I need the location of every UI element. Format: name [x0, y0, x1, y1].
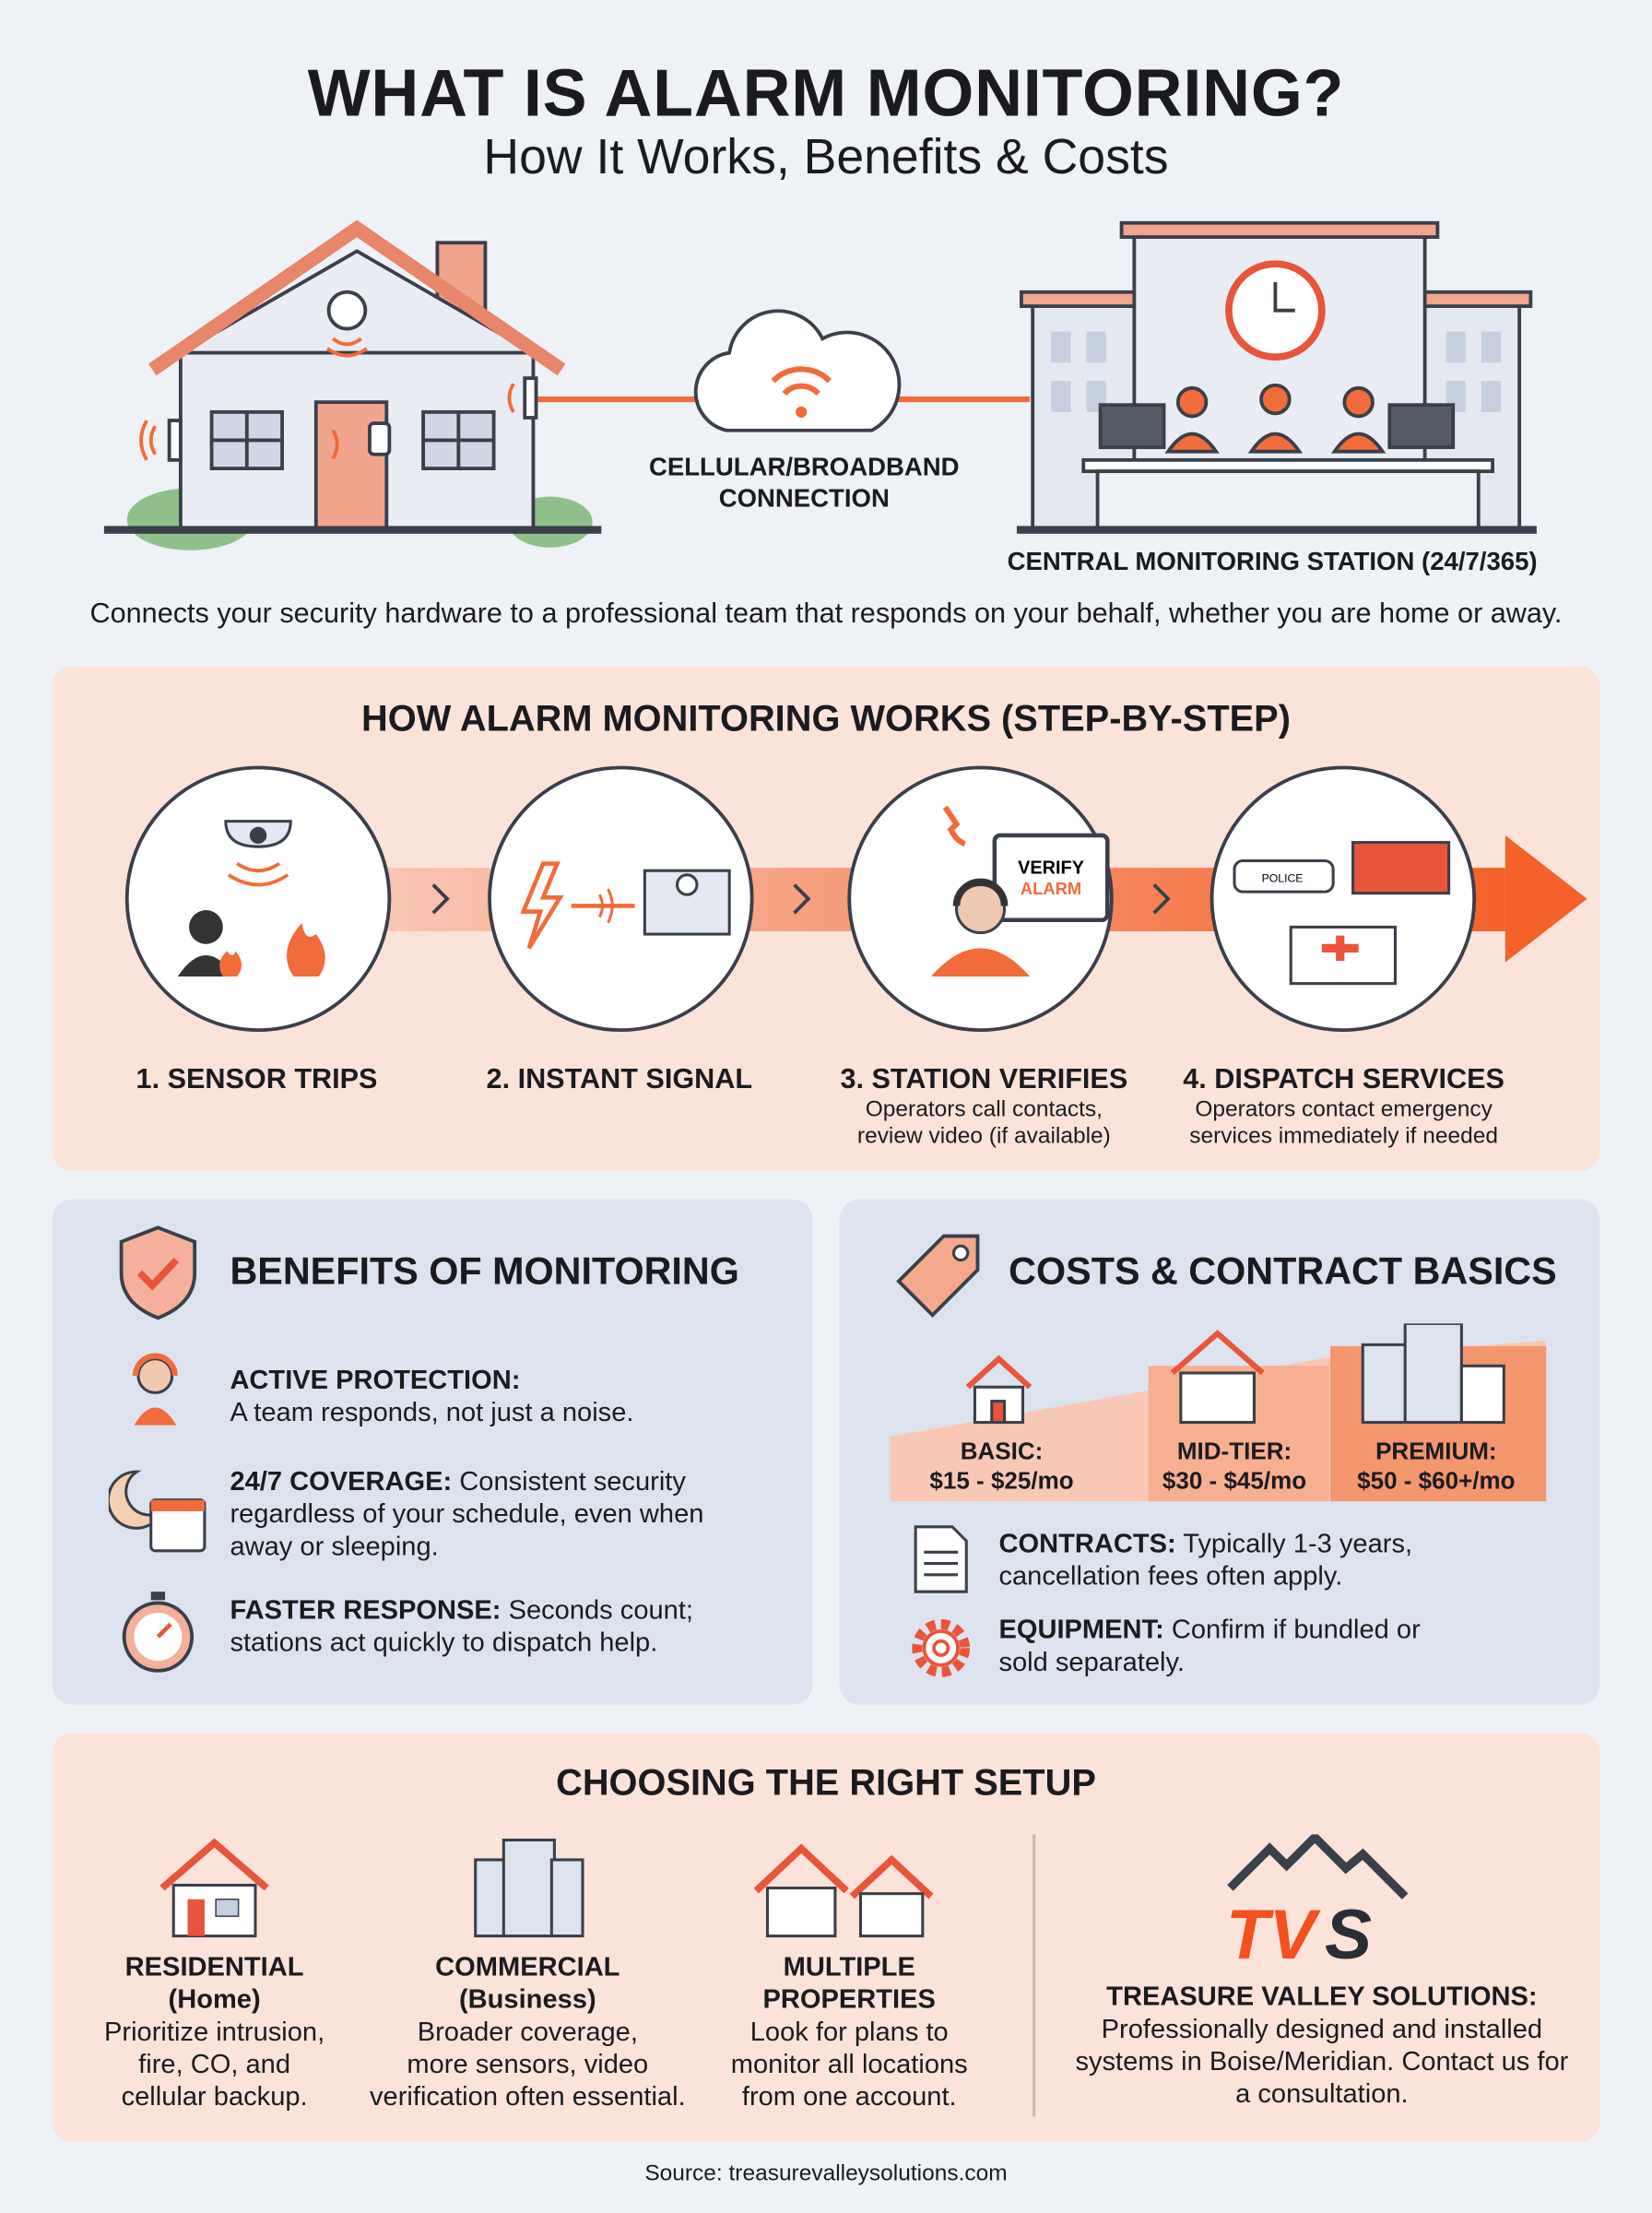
equipment: EQUIPMENT: Confirm if bundled or — [998, 1615, 1421, 1645]
label: connection: CONNECTION — [719, 484, 890, 512]
option: commercial: (Business) — [459, 1985, 596, 2015]
tier labels — [929, 1438, 1074, 1495]
option: multiple: MULTIPLE — [784, 1953, 915, 1982]
icon: shield — [120, 1225, 197, 1320]
panel: choosing setup — [53, 1733, 1599, 2142]
tier labels: $15 - $25/mo — [929, 1468, 1074, 1495]
benefit 2: 24/7 COVERAGE: Consistent security regardless of your schedule, even when away or sleeping. — [230, 1468, 703, 1562]
hero illustration — [103, 219, 1537, 550]
title: WHAT IS ALARM MONITORING? — [308, 55, 1344, 130]
option: multiple: PROPERTIES — [763, 1985, 936, 2015]
step 3 icon: VERIFY — [1018, 858, 1084, 878]
option: residential — [104, 1839, 324, 2112]
panel: how it works: Operators call contacts, — [866, 1098, 1103, 1122]
heading: costs: COSTS & CONTRACT BASICS — [1009, 1250, 1557, 1293]
option: commercial: verification often essential. — [370, 2083, 686, 2112]
panel: how it works: services immediately if needed — [1189, 1125, 1498, 1149]
label: station: CENTRAL MONITORING STATION (24/7/365) — [1008, 548, 1538, 575]
contracts — [914, 1525, 1412, 1593]
option: residential: RESIDENTIAL — [125, 1953, 304, 1982]
panel: costs: MID-TIER: — [1177, 1438, 1292, 1464]
option: multiple: from one account. — [742, 2083, 957, 2112]
panel: how it works: Operators contact emergency — [1195, 1098, 1493, 1122]
option: residential: Prioritize intrusion, — [104, 2018, 324, 2047]
subtitle: How It Works, Benefits & Costs — [483, 130, 1169, 184]
step 4 icon — [1210, 765, 1477, 1032]
panel: costs: $50 - $60+/mo — [1357, 1468, 1516, 1495]
heading: steps: HOW ALARM MONITORING WORKS (STEP-BY-STEP) — [361, 697, 1291, 740]
benefit 1 — [133, 1354, 633, 1428]
step 1 icon — [125, 765, 391, 1032]
TVS description: Professionally designed and installed systems in Boise/Meridian. Contact us for a consultation. — [1075, 2015, 1568, 2110]
option: commercial: more sensors, video — [407, 2051, 648, 2080]
source: Source: treasurevalleysolutions.com — [644, 2161, 1008, 2185]
icon: price tag — [896, 1234, 979, 1318]
step labels: 1. SENSOR TRIPS — [136, 1064, 377, 1095]
icon: cloud — [696, 311, 899, 431]
icon: house — [106, 229, 599, 550]
benefit 1: A team responds, not just a noise. — [230, 1399, 633, 1428]
step 4 icon: POLICE — [1262, 871, 1303, 884]
heading: benefits: BENEFITS OF MONITORING — [230, 1250, 739, 1293]
TVS description: TREASURE VALLEY SOLUTIONS: — [1106, 1982, 1538, 2012]
option: multiple: monitor all locations — [731, 2051, 968, 2080]
step 3 icon: ALARM — [1021, 879, 1081, 898]
tier labels: BASIC: — [961, 1438, 1043, 1464]
benefit 3 — [122, 1592, 693, 1673]
step 2 icon — [488, 765, 754, 1032]
equipment — [912, 1615, 1421, 1678]
option: multiple — [731, 1844, 968, 2112]
contracts: cancellation fees often apply. — [998, 1562, 1342, 1592]
icon: monitoring station — [1019, 223, 1535, 532]
connection lines — [537, 397, 1030, 401]
tagline: Connects your security hardware to a professional team that responds on your behalf, whether you are home or away. — [90, 598, 1562, 630]
panel: costs — [840, 1200, 1599, 1705]
label: connection — [649, 453, 960, 512]
equipment: sold separately. — [998, 1648, 1185, 1678]
option: commercial: COMMERCIAL — [435, 1953, 620, 1982]
panel: costs: $30 - $45/mo — [1162, 1468, 1306, 1495]
panel: benefits — [53, 1200, 812, 1705]
panel: how it works: 4. DISPATCH SERVICES — [1183, 1064, 1504, 1095]
option: commercial: Broader coverage, — [418, 2018, 638, 2047]
panel: how it works: 3. STATION VERIFIES — [840, 1064, 1127, 1095]
option: residential: (Home) — [169, 1985, 261, 2015]
panel: costs: PREMIUM: — [1375, 1438, 1497, 1464]
option: multiple: Look for plans to — [750, 2018, 949, 2047]
tier chart — [891, 1323, 1547, 1501]
panel: how it works — [53, 666, 1599, 1171]
heading: choosing: CHOOSING THE RIGHT SETUP — [556, 1761, 1096, 1804]
contracts: CONTRACTS: Typically 1-3 years, — [998, 1530, 1412, 1559]
logo: TVS — [1226, 1834, 1409, 1969]
option: residential: cellular backup. — [122, 2083, 308, 2112]
label: connection: CELLULAR/BROADBAND — [649, 453, 960, 481]
divider — [1032, 1834, 1035, 2116]
benefit 1: ACTIVE PROTECTION: — [230, 1366, 520, 1395]
benefit 3: FASTER RESPONSE: Seconds count; stations act quickly to dispatch help. — [230, 1596, 693, 1658]
panel: how it works: review video (if available) — [857, 1125, 1111, 1149]
panel: how it works: 2. INSTANT SIGNAL — [487, 1064, 752, 1095]
arrow band — [387, 835, 1587, 963]
option: commercial — [370, 1839, 686, 2112]
option: residential: fire, CO, and — [138, 2051, 290, 2080]
step 3 icon — [847, 765, 1114, 1032]
